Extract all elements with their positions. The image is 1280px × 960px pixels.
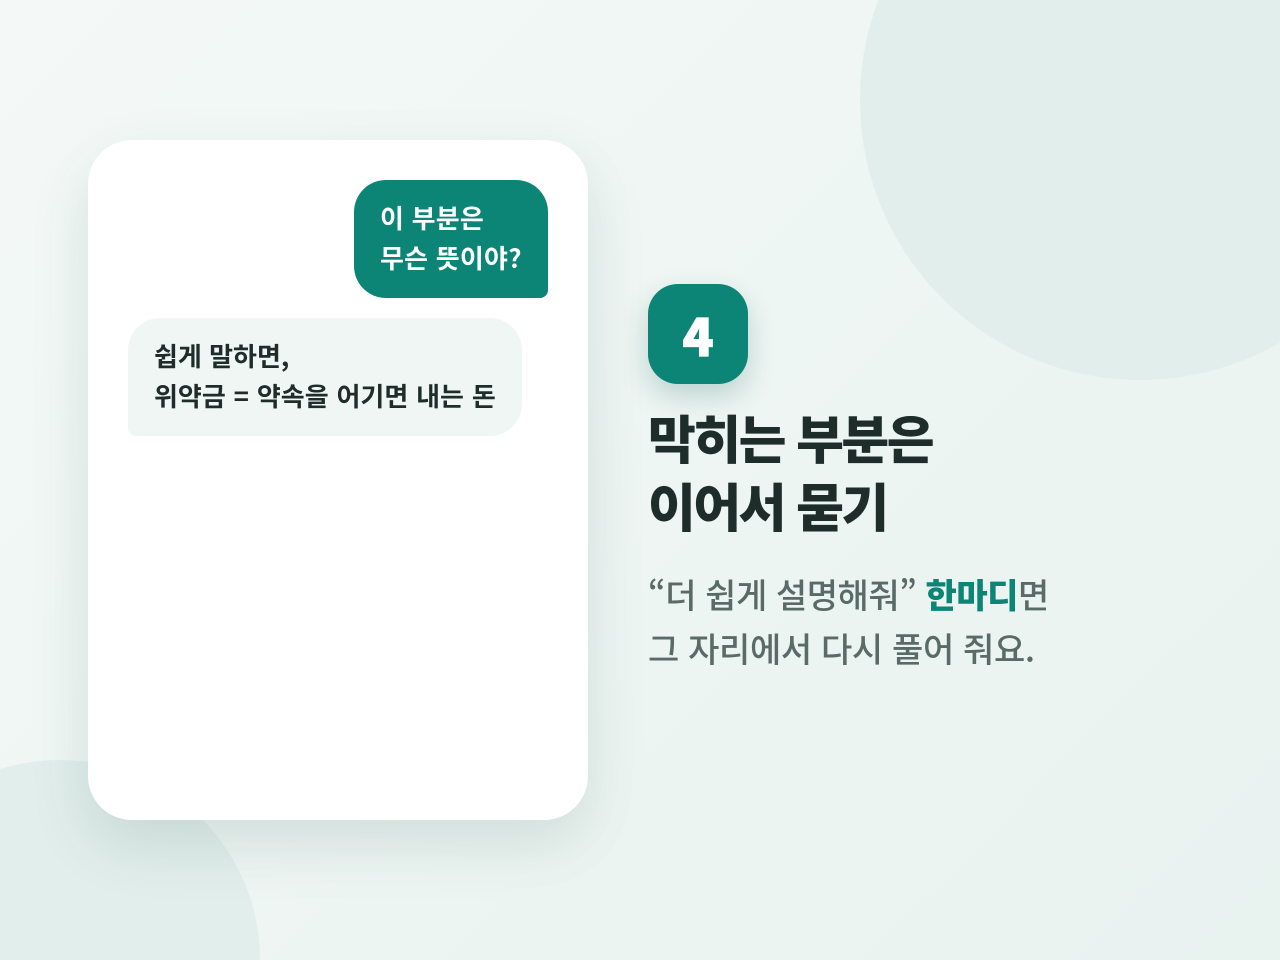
decorative circle: bottom left xyxy=(0,760,260,960)
step number badge: 4 xyxy=(682,297,714,371)
assistant chat bubble: 위약금 = 약속을 어기면 내는 돈 xyxy=(154,377,496,414)
decorative circle: top right xyxy=(860,0,1280,380)
step number badge xyxy=(648,284,748,384)
heading: 막히는 부분은 xyxy=(648,399,932,474)
user chat bubble: 무슨 뜻이야? xyxy=(380,239,522,276)
user chat bubble xyxy=(354,180,548,298)
heading: 이어서 묻기 xyxy=(648,467,887,542)
description text: “더 쉽게 설명해줘” 한마디면 xyxy=(648,569,1049,618)
description text xyxy=(648,569,1049,672)
assistant chat bubble: 쉽게 말하면, xyxy=(154,337,289,374)
description text: 그 자리에서 다시 풀어 줘요. xyxy=(648,623,1035,672)
assistant chat bubble xyxy=(128,318,522,436)
panel: chat card xyxy=(88,140,588,820)
user chat bubble: 이 부분은 xyxy=(380,199,484,236)
heading xyxy=(648,399,933,542)
